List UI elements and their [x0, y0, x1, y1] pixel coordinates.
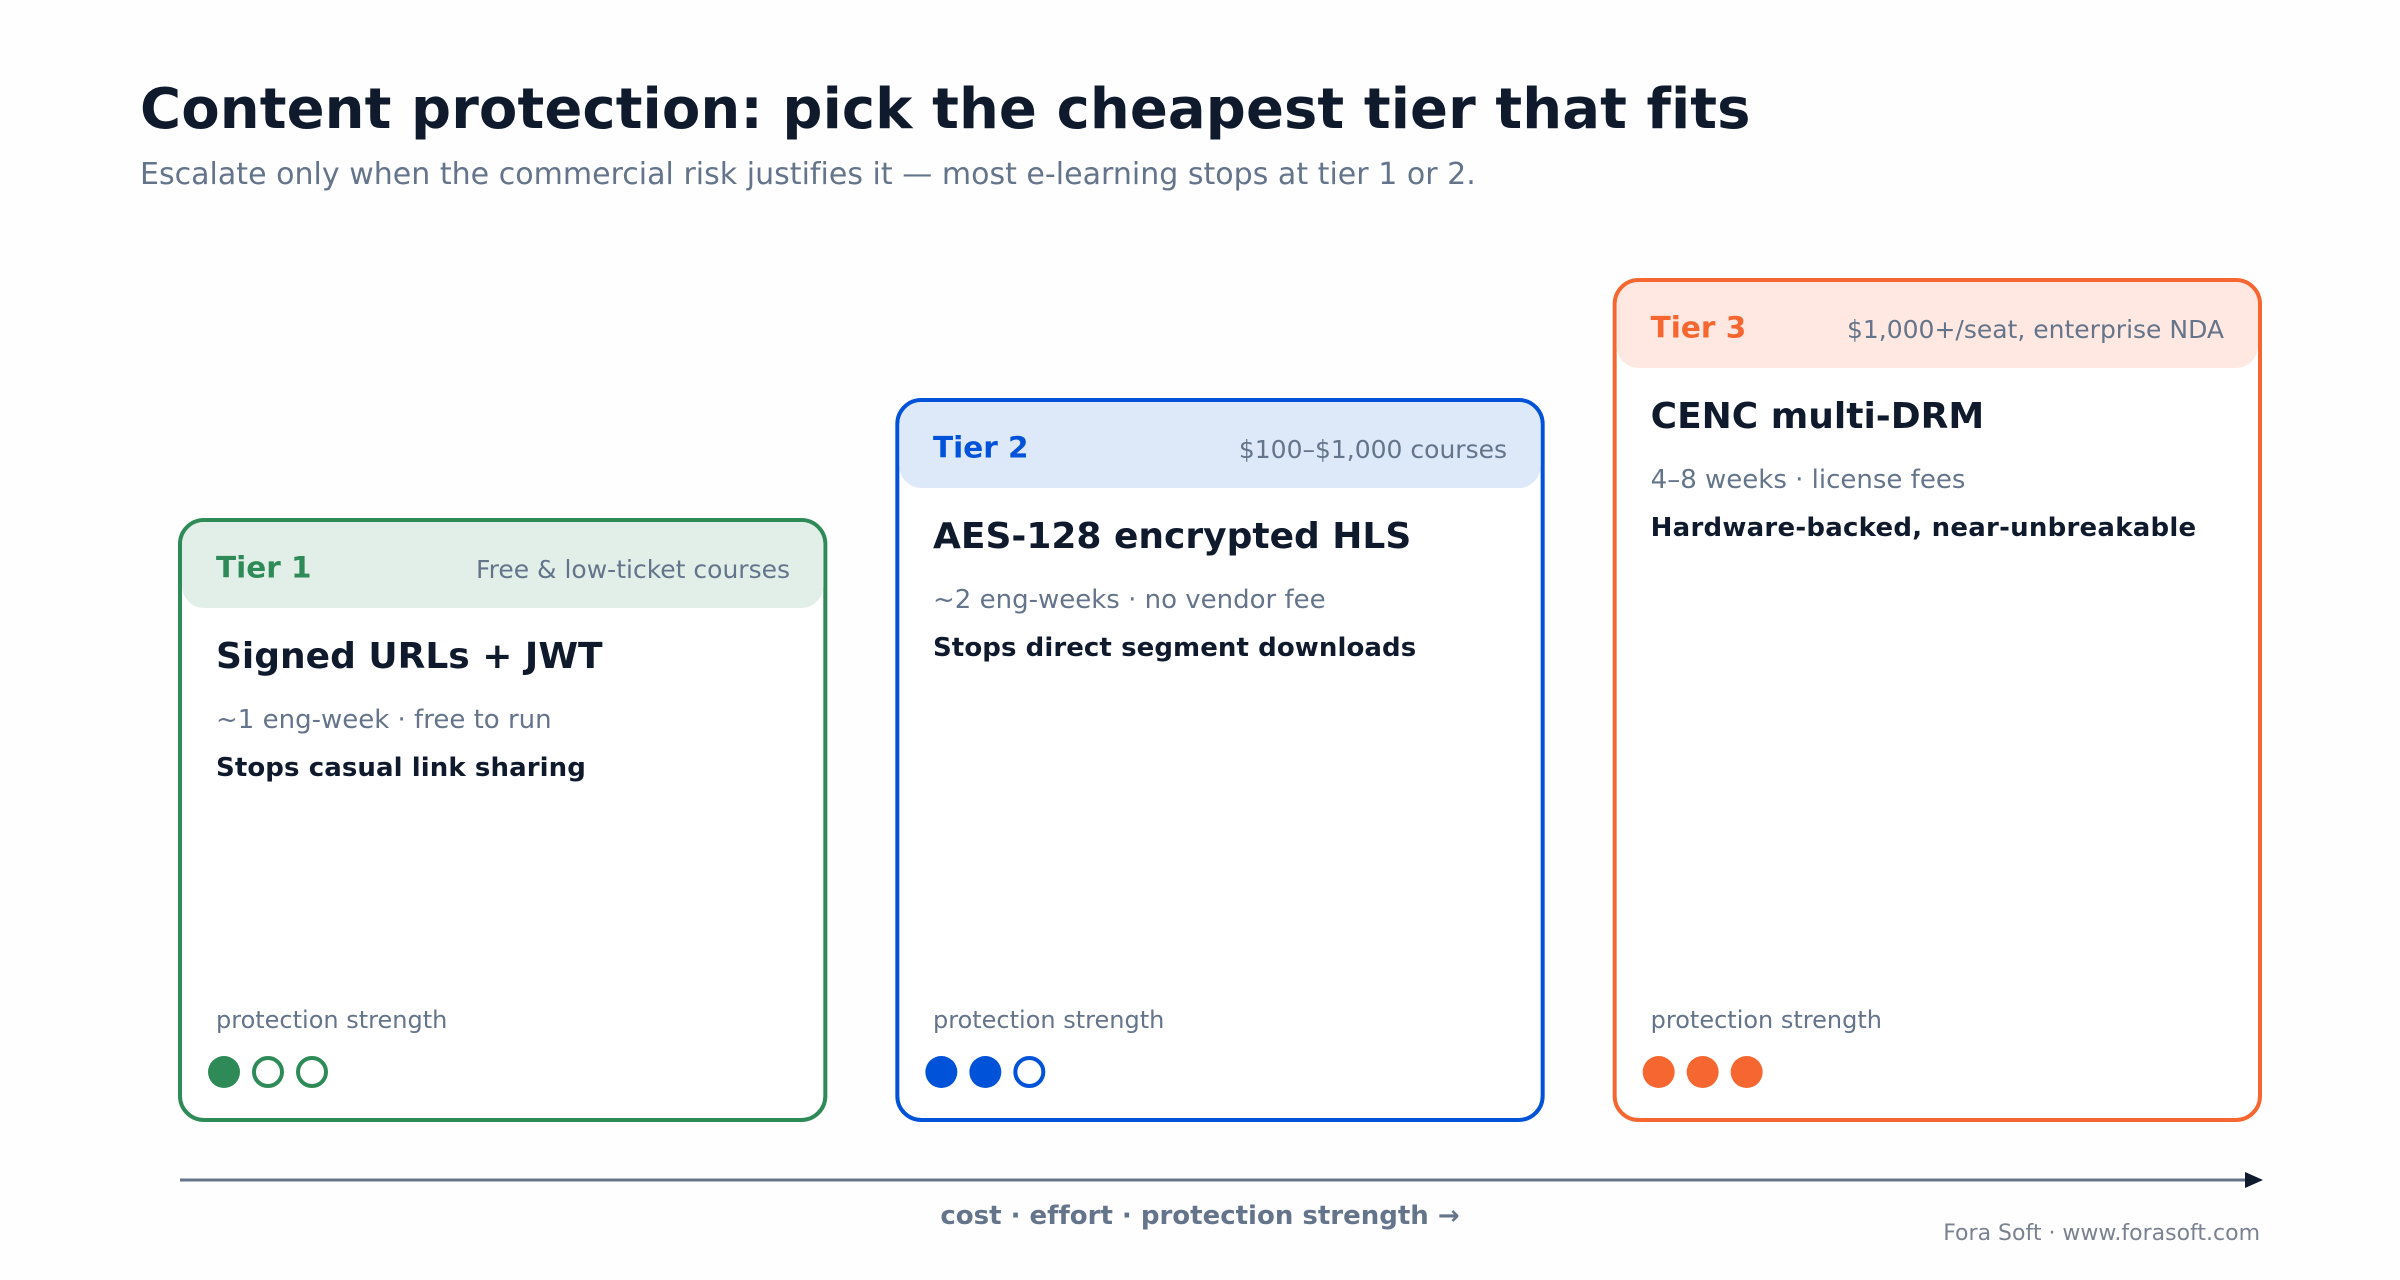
tier 1 strength dots: [208, 1056, 326, 1088]
tier 3 label: Tier 3: [1651, 310, 1746, 344]
tier 1 effort: ~1 eng-week · free to run: [216, 705, 552, 735]
panel: tier 2: [897, 400, 1543, 1120]
tier 3 name: CENC multi-DRM: [1651, 396, 1984, 437]
tier 3 effort: 4–8 weeks · license fees: [1651, 465, 1965, 495]
tier 3 strength dots: [1643, 1056, 1763, 1088]
tier 3 header band: [1617, 282, 2258, 368]
tier 3 strength label: protection strength: [1651, 1006, 1882, 1034]
panel: tier 3: [1615, 280, 2260, 1120]
tier 2 effort: ~2 eng-weeks · no vendor fee: [933, 585, 1326, 615]
tier 2 name: AES-128 encrypted HLS: [933, 516, 1411, 557]
tier 1 strength label: protection strength: [216, 1006, 447, 1034]
tier 2 outcome: Stops direct segment downloads: [933, 633, 1416, 663]
tier 3 outcome: Hardware-backed, near-unbreakable: [1651, 513, 2196, 543]
arrow: cost and effort axis: [180, 1172, 2263, 1188]
tier 2 label: Tier 2: [933, 430, 1029, 464]
tier 1 name: Signed URLs + JWT: [216, 636, 603, 677]
title: Content protection: pick the cheapest tier that fits: [140, 77, 1751, 142]
tier 1 label: Tier 1: [216, 550, 312, 584]
tier 2 strength label: protection strength: [933, 1006, 1164, 1034]
axis label: cost · effort · protection strength →: [940, 1201, 1460, 1231]
tier 2 audience: $100–$1,000 courses: [1239, 435, 1507, 464]
tier 2 header band: [899, 402, 1541, 488]
tier 1 header band: [182, 522, 823, 608]
tier 1 audience: Free & low-ticket courses: [476, 555, 790, 584]
subtitle: Escalate only when the commercial risk justifies it — most e-learning stops at tier 1 or 2.: [140, 157, 1476, 192]
tier 1 outcome: Stops casual link sharing: [216, 753, 586, 783]
tier 3 audience: $1,000+/seat, enterprise NDA: [1847, 315, 2224, 344]
panel: tier 1: [180, 520, 825, 1120]
tier 2 strength dots: [925, 1056, 1043, 1088]
footer credit: Fora Soft · www.forasoft.com: [1943, 1221, 2260, 1246]
